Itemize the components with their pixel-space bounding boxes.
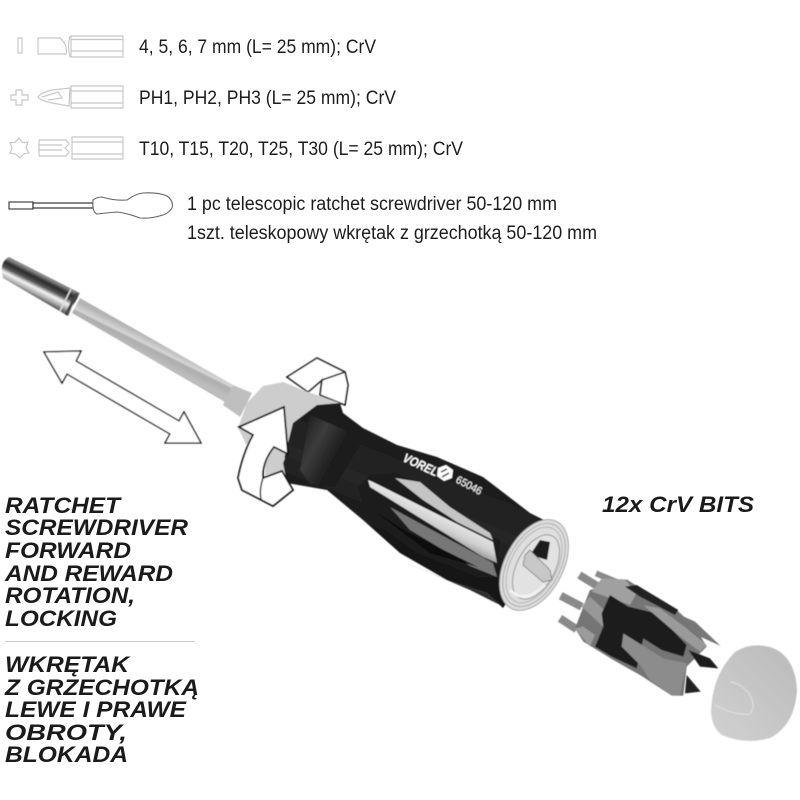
brand label [401, 450, 484, 498]
icon: screwdriver outline [9, 193, 172, 218]
feature text EN: RATCHET [5, 493, 122, 518]
text: screwdriver description PL: 1szt. teleskopowy wkrętak z grzechotką 50-120 mm [187, 223, 597, 244]
feature text EN: ROTATION, [5, 583, 135, 608]
feature text EN: LOCKING [5, 606, 117, 631]
feature text PL: WKRĘTAK [5, 652, 131, 677]
icon: phillips bit tip [11, 86, 123, 108]
back rotation arrow [287, 358, 348, 405]
feature text PL: Z GRZECHOTKĄ [4, 675, 199, 700]
screwdriver illustration [2, 257, 797, 741]
feature text EN: FORWARD [5, 538, 131, 563]
clear cap end [485, 508, 583, 622]
feature text PL [4, 652, 199, 767]
telescopic double arrow [44, 351, 201, 443]
icon: flat bit tip [18, 36, 123, 57]
logo mark [437, 465, 453, 481]
feature text EN [4, 493, 188, 631]
spec row: flat bits [18, 36, 376, 58]
icon: torx bit tip [10, 137, 123, 159]
text: phillips sizes: PH1, PH2, PH3 (L= 25 mm); CrV [139, 88, 396, 109]
bit tips [677, 613, 721, 646]
feature text PL: LEWE I PRAWE [5, 697, 187, 722]
rubber holder [625, 585, 678, 615]
grey ring [238, 382, 340, 482]
brand label: 65046 [454, 474, 484, 498]
handle ribs [300, 415, 360, 487]
text: flat sizes: 4, 5, 6, 7 mm (L= 25 mm); CrV [139, 37, 376, 58]
collar [223, 385, 252, 417]
feature text EN: AND REWARD [4, 561, 173, 586]
bits bundle [560, 573, 721, 696]
inner ring sliver [265, 449, 285, 476]
spec row: phillips bits [11, 86, 396, 109]
text: torx sizes: T10, T15, T20, T25, T30 (L= 25 mm); CrV [139, 139, 463, 160]
bits caption: 12x CrV BITS [602, 492, 754, 517]
front bits [643, 605, 707, 652]
feature text EN: SCREWDRIVER [5, 515, 188, 540]
bit bodies [575, 579, 707, 696]
feature text PL: OBROTY, [5, 720, 127, 745]
feature text PL: BLOKADA [5, 742, 128, 767]
shaft [72, 298, 233, 402]
front rotation arrow [238, 407, 293, 506]
handle body [283, 403, 558, 608]
torx tips [560, 573, 618, 629]
spec row: screwdriver [9, 193, 597, 244]
text: screwdriver description EN: 1 pc telescopic ratchet screwdriver 50-120 mm [187, 194, 557, 215]
cap dome [711, 645, 797, 741]
clear window [358, 473, 503, 608]
spec row: torx bits [10, 137, 463, 160]
brand label: VOREL [401, 450, 441, 479]
bit socket [2, 257, 80, 316]
